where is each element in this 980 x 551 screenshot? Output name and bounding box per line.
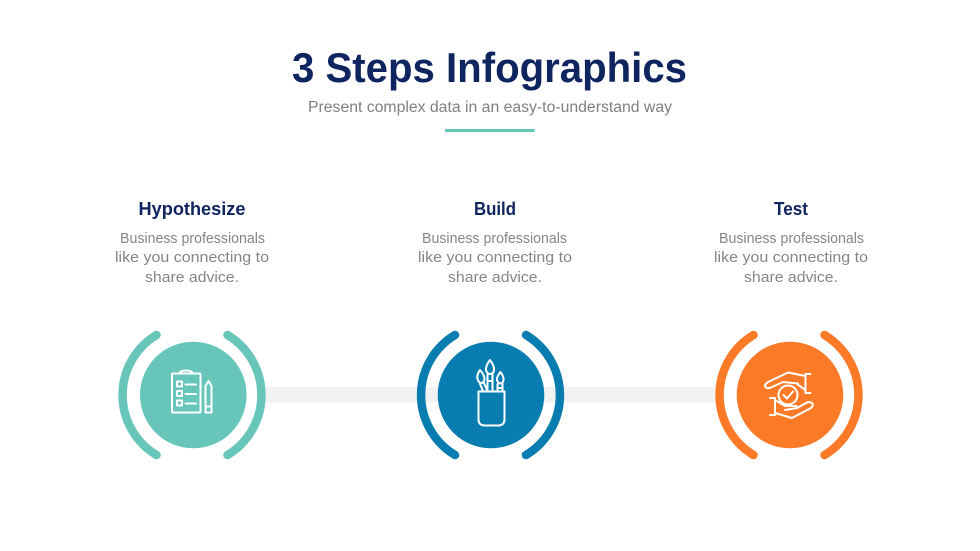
text block: build: Business professionals bbox=[422, 231, 567, 247]
connector bar bbox=[262, 387, 722, 402]
ring arcs: teal bbox=[123, 335, 261, 455]
circle: teal bbox=[140, 342, 247, 448]
text block: hypothesize: Business professionals bbox=[120, 231, 265, 247]
text block: build: share advice. bbox=[448, 270, 542, 286]
circle: orange bbox=[737, 342, 843, 448]
subtitle: Present complex data in an easy-to-understand way bbox=[308, 99, 672, 116]
circle: blue bbox=[438, 342, 544, 448]
icon: brushes in a cup bbox=[477, 360, 504, 426]
text block: build: like you connecting to bbox=[418, 250, 572, 266]
title: 3 Steps Infographics bbox=[292, 44, 687, 91]
heading: test: Test bbox=[774, 199, 808, 219]
icon: clipboard checklist and pencil bbox=[172, 370, 212, 412]
text block: hypothesize: share advice. bbox=[145, 270, 239, 286]
heading: build: Build bbox=[474, 199, 516, 219]
text block: test bbox=[714, 231, 868, 286]
step 2: build bbox=[418, 199, 572, 455]
ring arcs: blue bbox=[421, 335, 560, 455]
icon: hands holding a check badge bbox=[765, 372, 813, 418]
text block: test: share advice. bbox=[744, 270, 838, 286]
step 3: test bbox=[714, 199, 868, 455]
text block: test: like you connecting to bbox=[714, 250, 868, 266]
title divider bbox=[445, 129, 534, 132]
text block: test: Business professionals bbox=[719, 231, 864, 247]
text block: build bbox=[418, 231, 572, 286]
text block: hypothesize: like you connecting to bbox=[115, 250, 269, 266]
step 1: hypothesize bbox=[115, 199, 269, 455]
text block: hypothesize bbox=[115, 231, 269, 286]
heading: hypothesize: Hypothesize bbox=[138, 199, 246, 219]
ring arcs: orange bbox=[720, 335, 858, 455]
